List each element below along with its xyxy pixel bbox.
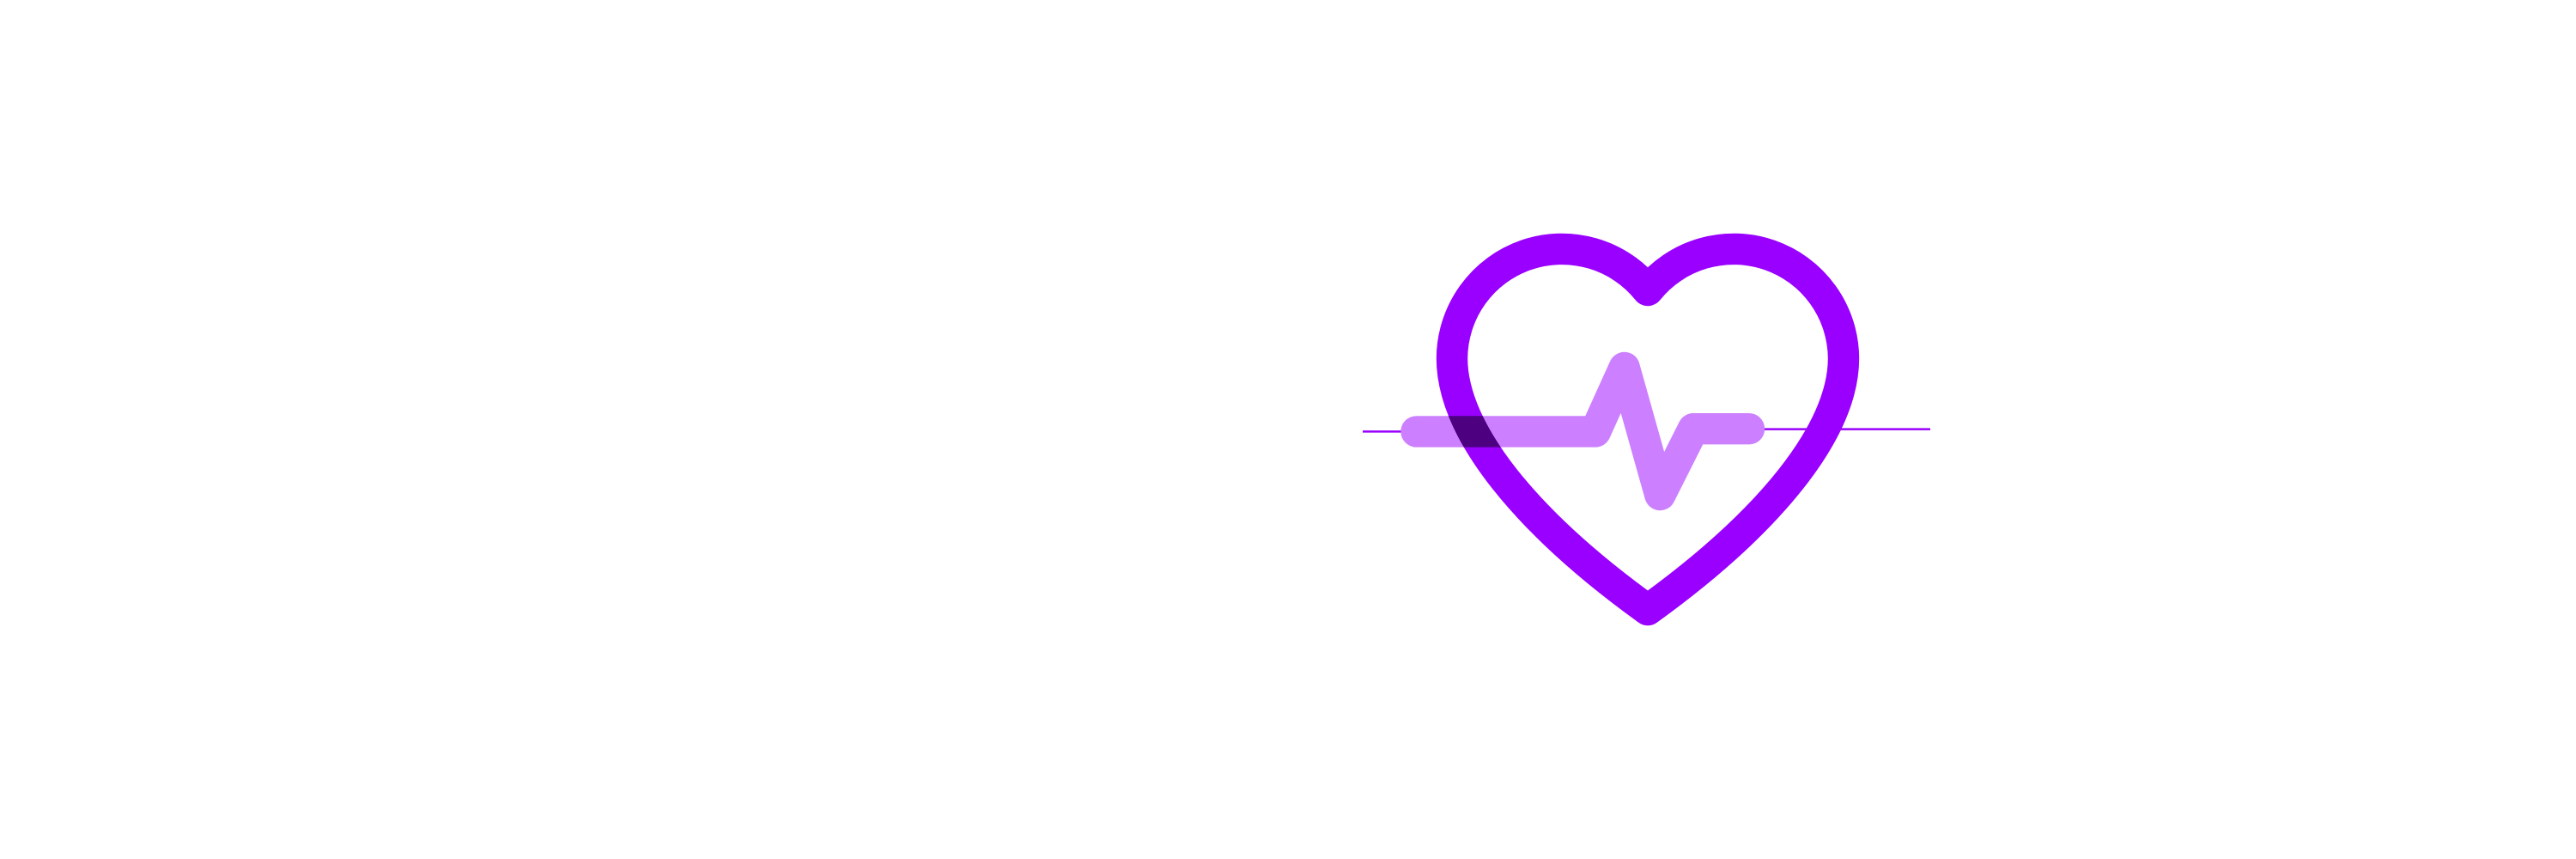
- overlap of pulse and heart: [1448, 416, 1501, 448]
- heart outline: [1452, 249, 1844, 610]
- icon: heart with pulse line: [1363, 234, 1930, 625]
- baseline: right segment: [1749, 428, 1930, 430]
- pulse line: [1417, 368, 1749, 495]
- baseline: left segment: [1363, 430, 1417, 433]
